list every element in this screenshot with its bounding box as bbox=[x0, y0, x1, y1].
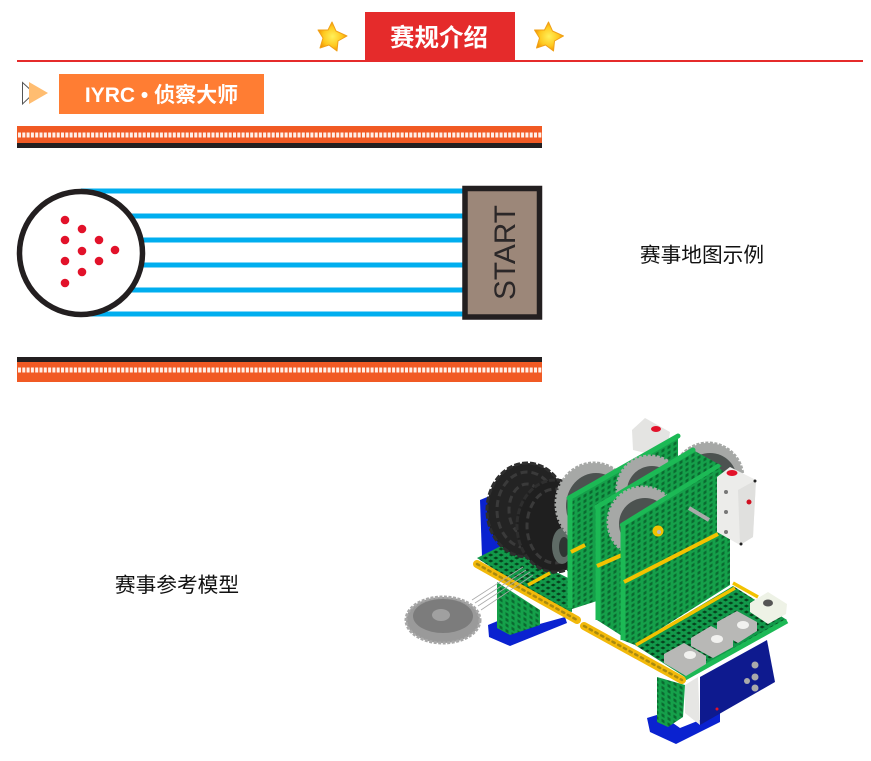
left blue foot and post bbox=[480, 495, 567, 646]
lower left green plate bbox=[497, 582, 540, 635]
numbered red points bbox=[61, 216, 119, 287]
tires bbox=[487, 463, 593, 572]
second gear bbox=[617, 456, 683, 522]
start box bbox=[465, 188, 540, 317]
blue lane lines bbox=[81, 188, 464, 316]
section heading: IYRC • 侦察大师 bbox=[85, 84, 238, 107]
map caption: 赛事地图示例 bbox=[640, 244, 764, 267]
front gear bbox=[608, 487, 678, 557]
panel: competition map bbox=[17, 126, 542, 382]
robot model illustration bbox=[406, 418, 787, 744]
third gear bbox=[673, 443, 743, 513]
green plate one bbox=[569, 436, 678, 610]
top track border bbox=[17, 126, 542, 148]
icon: section arrow bbox=[22, 82, 48, 104]
yellow strip rear deck bbox=[528, 573, 550, 585]
gear behind first plate bbox=[556, 463, 632, 545]
title rule bbox=[17, 60, 863, 62]
front green plate bbox=[622, 466, 730, 645]
start box: START bbox=[489, 205, 522, 300]
yellow deck strips bbox=[636, 583, 758, 645]
right blue foot bbox=[647, 712, 720, 744]
green deck trim bbox=[685, 621, 787, 678]
green plate two bbox=[597, 450, 722, 636]
loose gear bbox=[406, 597, 480, 643]
target circle bbox=[20, 192, 142, 314]
front sensor block bbox=[717, 467, 756, 546]
buttons on deck bbox=[664, 592, 787, 676]
blue controller bbox=[685, 640, 775, 725]
title banner bbox=[365, 12, 515, 61]
title banner: 赛规介绍 bbox=[390, 23, 488, 52]
icon: left star bbox=[318, 22, 347, 51]
rear sensor block bbox=[632, 418, 670, 454]
assembly guide lines bbox=[472, 567, 533, 610]
rear right post bbox=[657, 677, 685, 727]
icon: right star bbox=[534, 22, 564, 51]
rear green deck left bbox=[477, 545, 572, 612]
bottom track border bbox=[17, 357, 542, 382]
model caption: 赛事参考模型 bbox=[115, 574, 239, 597]
base deck bbox=[635, 586, 787, 677]
yellow front beam bbox=[477, 564, 682, 680]
section heading bbox=[59, 74, 264, 114]
